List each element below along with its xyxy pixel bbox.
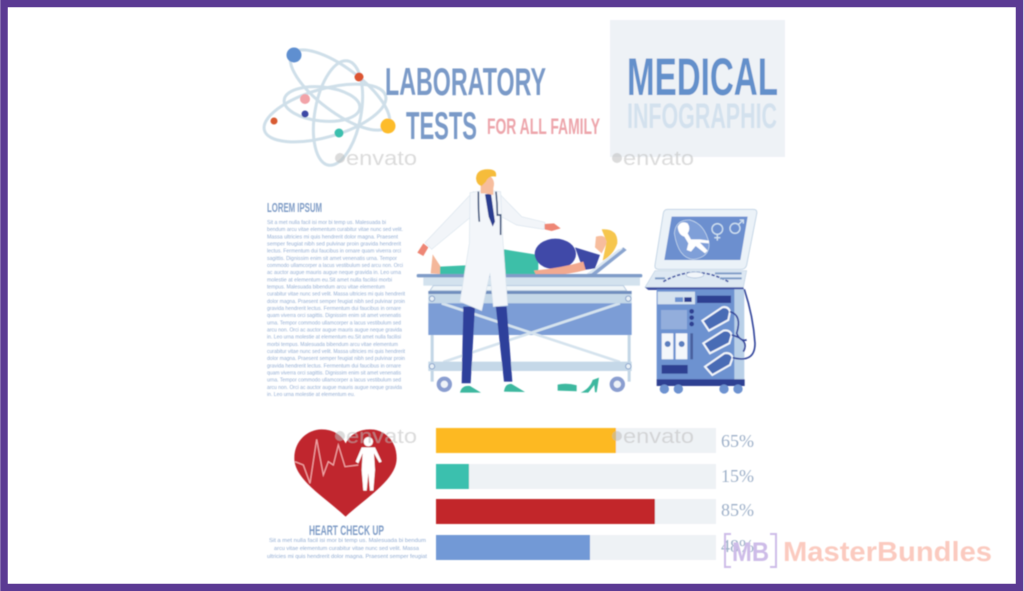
bar: 15% [436, 464, 754, 489]
bar: 65% [436, 428, 754, 453]
watermarks: envato: envato [346, 426, 417, 448]
text block: lorem ipsum body: curabitur vitae nunc sed velit. Massa ultricies mi quis hendrerit [267, 349, 406, 355]
keyboard [645, 271, 747, 290]
bar chart [436, 428, 754, 560]
text block: lorem ipsum body: ac auctor augue mauris augue neque gravida in. Leo urna [267, 270, 401, 276]
text block: lorem ipsum body: gravida hendrerit lectus. Fermentum dui faucibus in ornare [267, 306, 401, 312]
icon: heart with ECG and body [294, 429, 397, 517]
text block: lorem ipsum body: urna. Tempor commodo ullamcorper a lacus vestibulum sed [267, 378, 401, 384]
text block: lorem ipsum body: quam viverra orci sagittis. Dignissim enim sit amet venenatis [267, 370, 401, 376]
shoes on floor [558, 378, 599, 393]
bar: 85%: 85% [721, 500, 754, 520]
watermarks: envato: envato [346, 148, 417, 170]
bar: 65%: 65% [721, 431, 754, 451]
text block: lorem ipsum body: dolor magna. Praesent semper feugiat nibh sed pulvinar proin [267, 299, 405, 305]
watermarks: envato: envato [623, 148, 694, 170]
text block: lorem ipsum body: morbi tempus. Malesuada bibendum arcu vitae elementum [267, 342, 398, 348]
text block: lorem ipsum body: gravida hendrerit lectus. Fermentum dui faucibus in ornare [267, 363, 401, 369]
panel: medical infographic: INFOGRAPHIC [627, 97, 777, 136]
bar: 48%: 48% [721, 536, 754, 556]
text block: lorem ipsum body: Sit a met nulla facil isi mor bi temp us. Malesuada bi [267, 220, 386, 226]
text block: lorem ipsum body: dolor magna. Praesent semper feugiat nibh sed pulvinar proin [267, 356, 405, 362]
monitor [655, 209, 757, 269]
text block: lorem ipsum body: sagittis. Dignissim enim sit amet venenatis urna. Tempor [267, 256, 397, 262]
text block: lorem ipsum body [267, 220, 406, 398]
text block: lorem ipsum body: curabitur vitae nunc sed velit. Massa ultricies mi quis hendrerit [267, 292, 406, 298]
watermark: MasterBundles logo: MB [732, 537, 769, 567]
icon: atom logo [258, 36, 401, 169]
text block: lorem ipsum body: tempus. Malesuada bibendum arcu vitae elementum [267, 284, 385, 290]
text block: lorem ipsum body: in. Leo urna molestie at elementum eu. [267, 392, 355, 398]
bar: 48% [436, 535, 754, 560]
text block: lorem ipsum body: arcu non. Orci ac auctor augue mauris augue neque gravida [267, 328, 402, 334]
text block: lorem ipsum body: molestie at elementum eu.Sit amet nulla facilisi morbi [267, 277, 392, 283]
text block: lorem ipsum body: bendum arcu vitae elementum curabitur vitae nunc sed velit. [267, 227, 403, 233]
watermarks: envato [335, 148, 694, 448]
text block: heart check up description [267, 538, 428, 560]
heading: heart check up: HEART CHECK UP [309, 522, 384, 538]
panel: medical infographic: MEDICAL [627, 48, 778, 107]
text block: lorem ipsum body: urna. Tempor commodo ullamcorper a lacus vestibulum sed [267, 320, 401, 326]
text block: heart check up description: Sit a met nulla facil isi mor bi temp us. Malesuada bi bendum [269, 538, 426, 544]
text block: lorem ipsum body: commodo ullamcorper a lacus vestibulum sed arcu non. Orci [267, 263, 403, 269]
bed [423, 277, 640, 392]
subtitle: for all family: FOR ALL FAMILY [487, 114, 600, 139]
patient [417, 229, 642, 277]
watermarks: envato: envato [623, 426, 694, 448]
heading: lorem ipsum: LOREM IPSUM [267, 201, 322, 215]
title: laboratory tests [385, 61, 546, 148]
text block: lorem ipsum body: lectus. Fermentum dui faucibus in ornare quam viverra orci [267, 249, 401, 255]
illustration: ultrasound machine [645, 209, 757, 394]
text block: lorem ipsum body: arcu non. Orci ac auctor augue mauris augue neque gravida [267, 385, 402, 391]
title: laboratory tests: TESTS [406, 105, 477, 148]
text block: lorem ipsum body: quam viverra orci sagittis. Dignissim enim sit amet venenatis [267, 313, 401, 319]
bar: 85% [436, 499, 754, 524]
watermark: MasterBundles logo: MasterBundles [783, 536, 992, 567]
panel: medical infographic [610, 20, 785, 157]
text block: lorem ipsum body: in. Leo urna molestie at elementum eu.Sit amet nulla facilisi [267, 335, 401, 341]
title: laboratory tests: LABORATORY [385, 61, 546, 104]
text block: heart check up description: arcu vitae elementum curabitur vitae nunc sed velit. Massa [274, 546, 419, 552]
bar: 15%: 15% [721, 466, 754, 486]
infographic content [258, 20, 992, 567]
machine body [657, 289, 755, 394]
text block: lorem ipsum body: semper feugiat nibh sed pulvinar proin gravida hendrerit [267, 242, 402, 248]
illustration: doctor and patient on bed [417, 169, 642, 393]
text block: lorem ipsum body: Massa ultricies mi quis hendrerit dolor magna. Praesent [267, 234, 399, 240]
text block: heart check up description: ultricies mi quis hendrerit dolor magna. Praesent semper feugiat [267, 554, 428, 560]
doctor [417, 169, 561, 393]
